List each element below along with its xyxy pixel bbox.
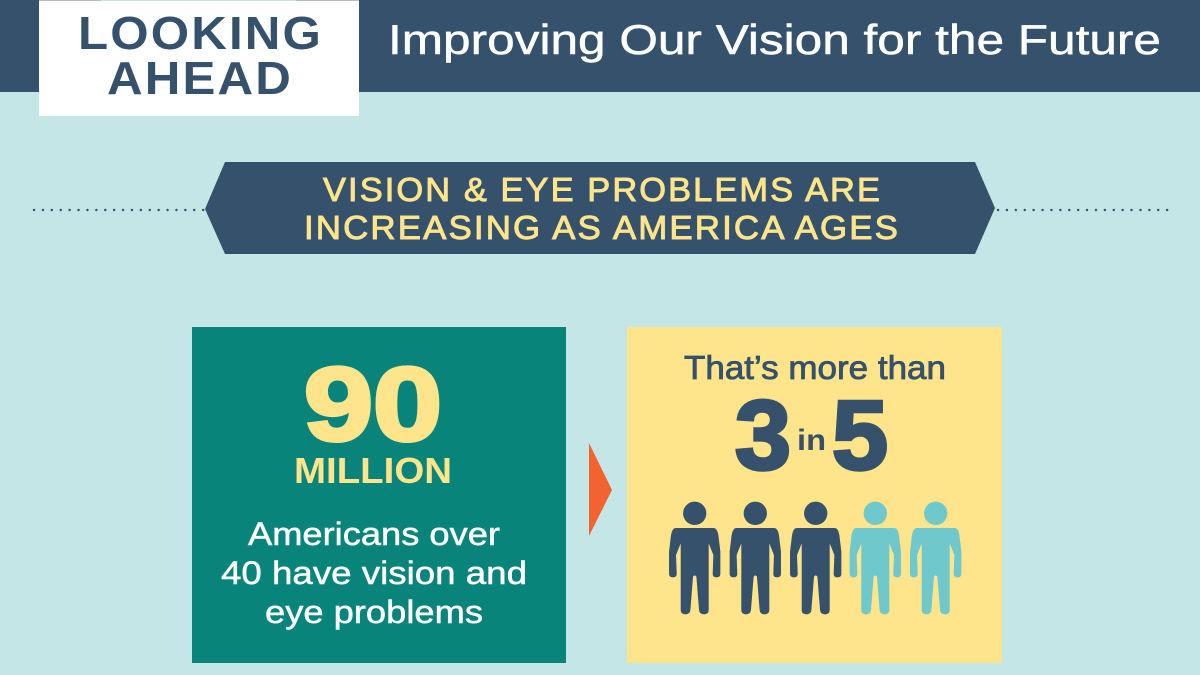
person 4 [850, 502, 901, 614]
person 3 [790, 502, 841, 614]
person 2 [730, 502, 781, 614]
description text [221, 516, 527, 630]
big number 90: 90 [304, 347, 442, 463]
description text: 40 have vision and [221, 555, 527, 591]
dotted line left [34, 209, 205, 211]
ratio 3 in 5: 3 [735, 380, 791, 490]
person icon row [669, 502, 961, 614]
header title: Improving Our Vision for the Future [388, 16, 1161, 63]
banner: vision and eye problems [205, 162, 995, 254]
description text: eye problems [265, 594, 483, 630]
ratio 3 in 5 [735, 380, 888, 490]
banner: vision and eye problems: INCREASING AS AMERICA AGES [304, 209, 900, 246]
panel: 90 million [192, 327, 566, 663]
person 1 [669, 502, 720, 614]
description text: Americans over [248, 516, 500, 552]
looking ahead label: LOOKING [78, 7, 323, 59]
lead-in text: That’s more than [684, 349, 946, 386]
ratio 3 in 5: 5 [832, 380, 888, 490]
panel: 3 in 5 [627, 327, 1002, 663]
person 5 [910, 502, 961, 614]
looking ahead label [39, 1, 359, 116]
banner: vision and eye problems: VISION & EYE PROBLEMS ARE [323, 171, 882, 208]
ratio 3 in 5: in [797, 424, 826, 457]
looking ahead label: AHEAD [107, 52, 293, 104]
million label: MILLION [294, 450, 452, 491]
dotted line right [998, 209, 1169, 211]
arrow [589, 443, 612, 536]
header bar [0, 0, 1200, 92]
